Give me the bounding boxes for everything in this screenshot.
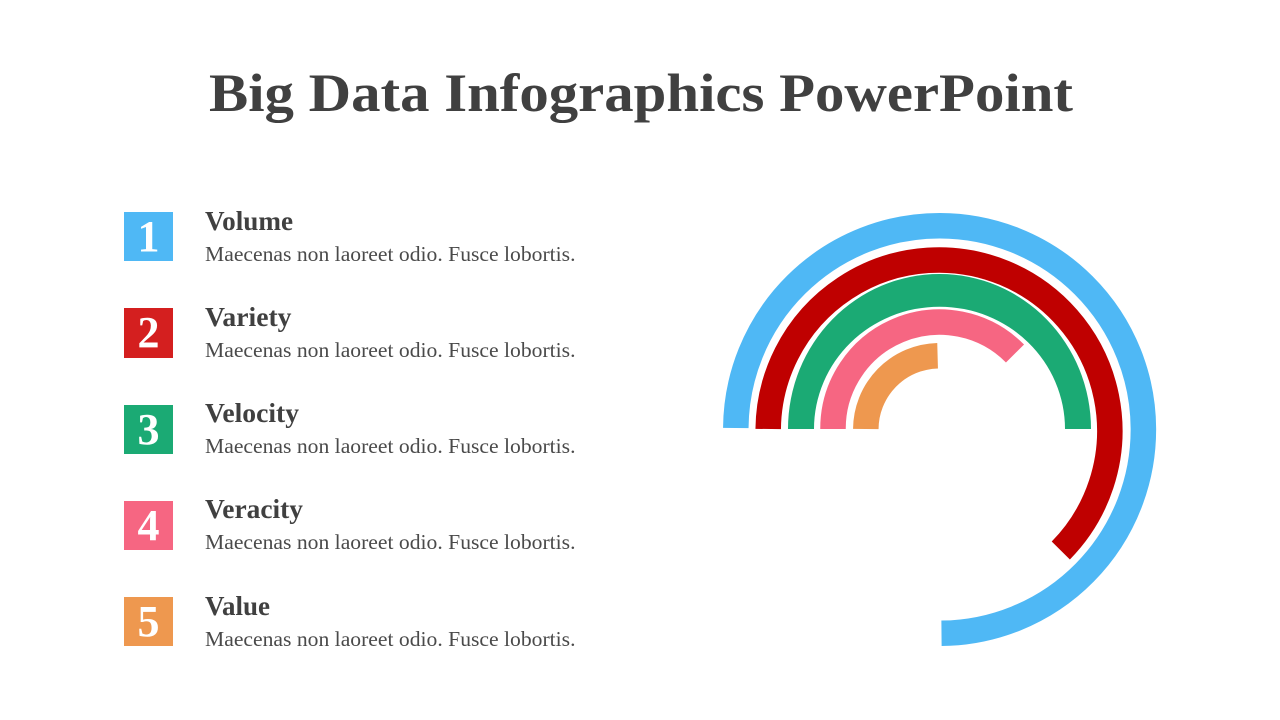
radial arc chart [736, 226, 1143, 633]
number badge 1: 1 [138, 212, 160, 261]
number badge 3 [124, 405, 173, 454]
description 2: Maecenas non laoreet odio. Fusce lobortis. [205, 338, 576, 362]
list item 1: Volume [124, 206, 576, 266]
description 5: Maecenas non laoreet odio. Fusce lobortis. [205, 627, 576, 651]
number badge 2: 2 [138, 308, 160, 357]
description 1: Maecenas non laoreet odio. Fusce lobortis. [205, 242, 576, 266]
list item 3: Velocity [124, 398, 576, 458]
arc: Velocity [788, 274, 1091, 429]
heading: Volume: Volume [205, 206, 293, 236]
list item 2: Variety [124, 302, 576, 362]
arc: Veracity [833, 322, 1015, 429]
arc: Volume [736, 226, 1143, 633]
list item 4: Veracity [124, 494, 576, 554]
description 4: Maecenas non laoreet odio. Fusce lobortis. [205, 530, 576, 554]
number badge 4: 4 [138, 501, 160, 550]
description 3: Maecenas non laoreet odio. Fusce lobortis. [205, 434, 576, 458]
heading: Variety: Variety [205, 302, 292, 332]
heading: Velocity: Velocity [205, 398, 300, 428]
title: Big Data Infographics PowerPoint [209, 63, 1073, 123]
number badge 4 [124, 501, 173, 550]
arc: Value [866, 356, 938, 429]
number badge 5: 5 [138, 597, 160, 646]
heading: Value: Value [205, 591, 270, 621]
list item 5: Value [124, 591, 576, 651]
number badge 2 [124, 308, 173, 358]
heading: Veracity: Veracity [205, 494, 304, 524]
arc: Variety [768, 260, 1110, 550]
number badge 1 [124, 212, 173, 261]
number badge 5 [124, 597, 173, 646]
number badge 3: 3 [138, 405, 160, 454]
